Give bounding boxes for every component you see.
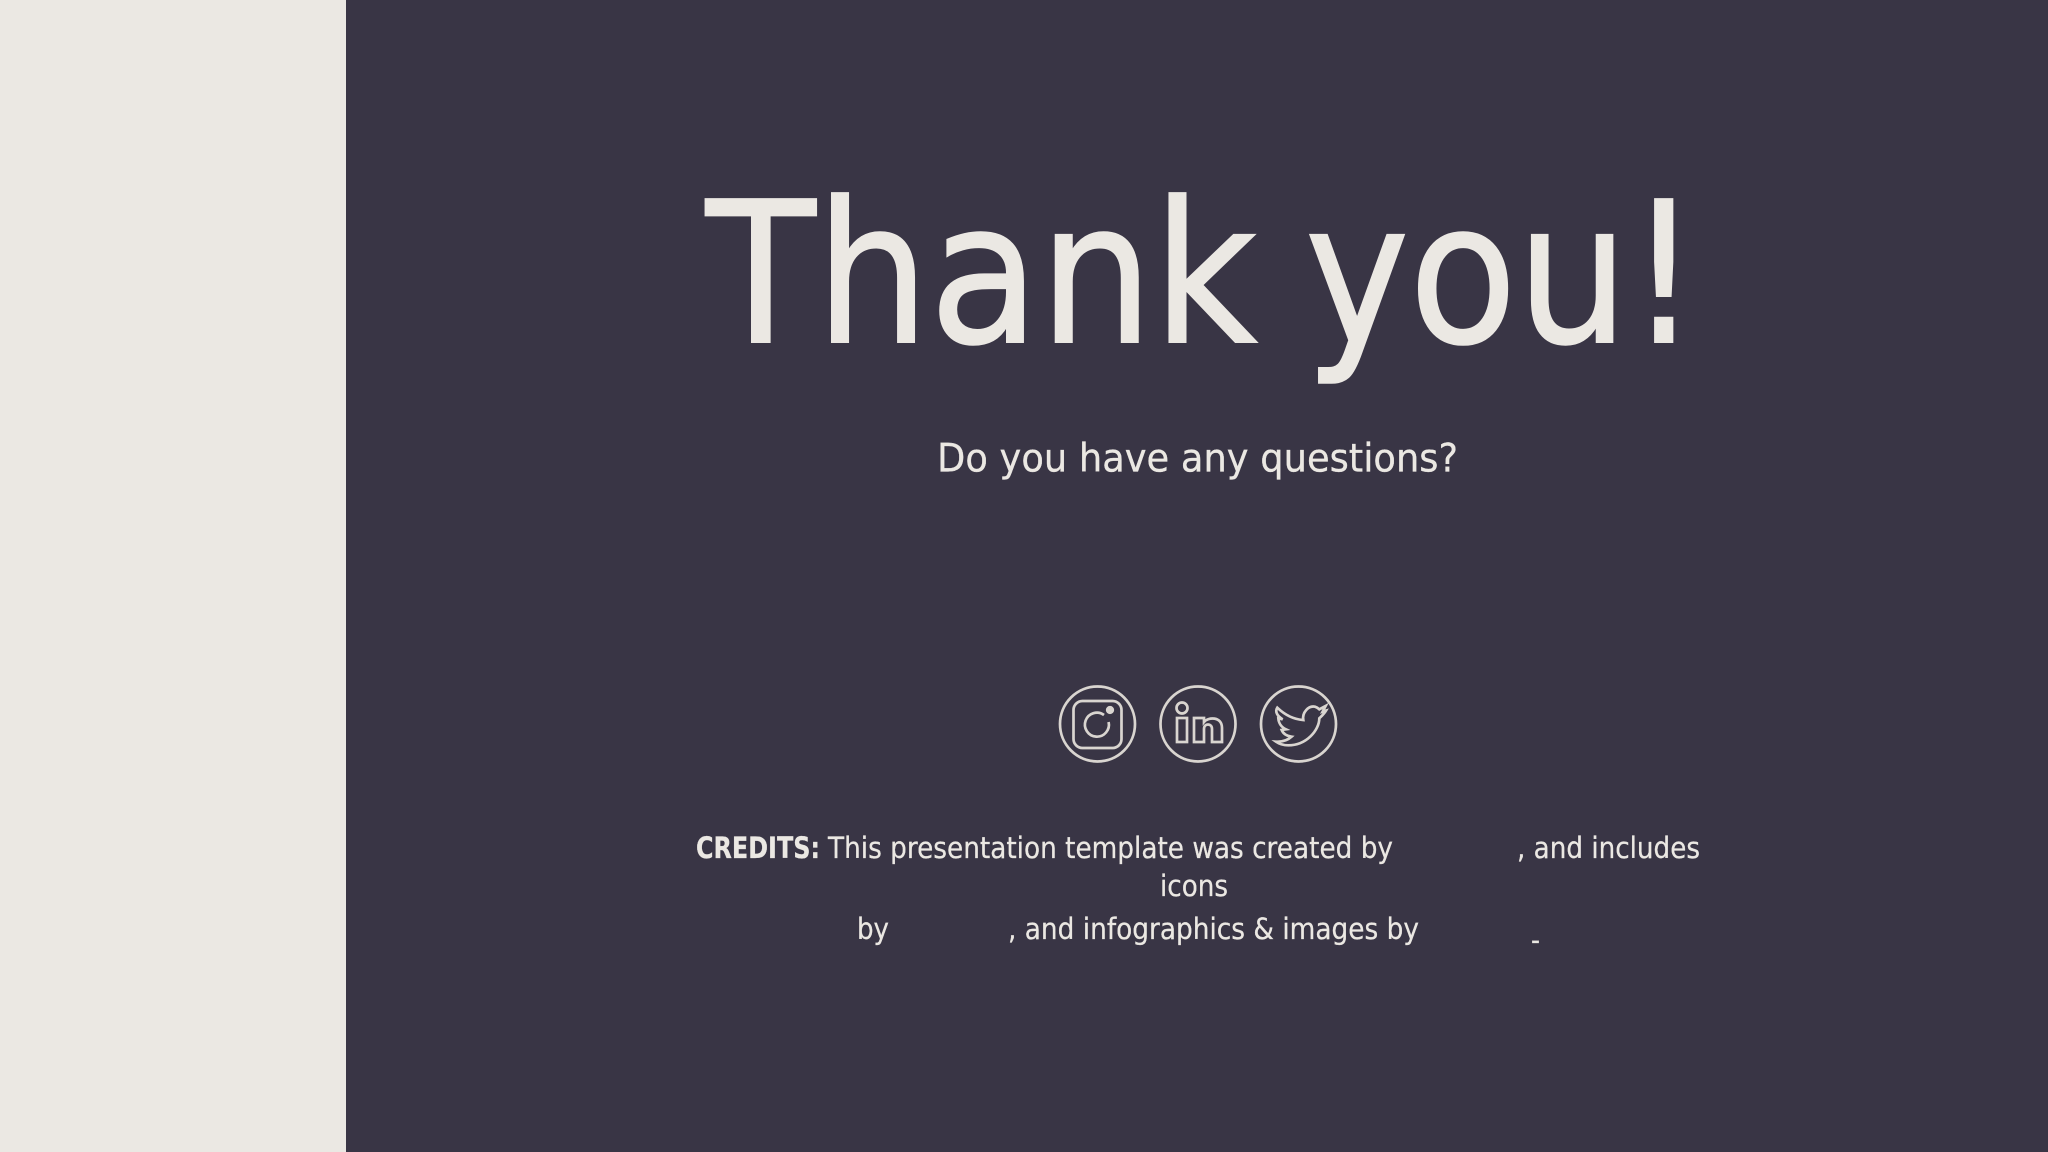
credits trailing dash: - [1531, 923, 1540, 957]
social icons row [1060, 686, 1336, 762]
credits line 2: icons [1160, 869, 1228, 903]
title: you! [1305, 161, 1699, 389]
credits text block [696, 831, 1700, 957]
credits line 3 middle: , and infographics & images by [1008, 912, 1419, 946]
credits line 3 start: by [857, 912, 889, 946]
title: Thank [705, 161, 1257, 389]
title [705, 161, 1699, 389]
credits label: CREDITS: [696, 831, 820, 865]
icon: instagram [1060, 686, 1135, 762]
credits line 1 end: , and includes [1517, 831, 1700, 865]
subtitle: Do you have any questions? [937, 436, 1458, 482]
icon: twitter [1261, 686, 1336, 762]
panel: light left sidebar [0, 0, 346, 1152]
icon: linkedin [1160, 686, 1236, 762]
credits line 1: This presentation template was created by [827, 831, 1393, 865]
